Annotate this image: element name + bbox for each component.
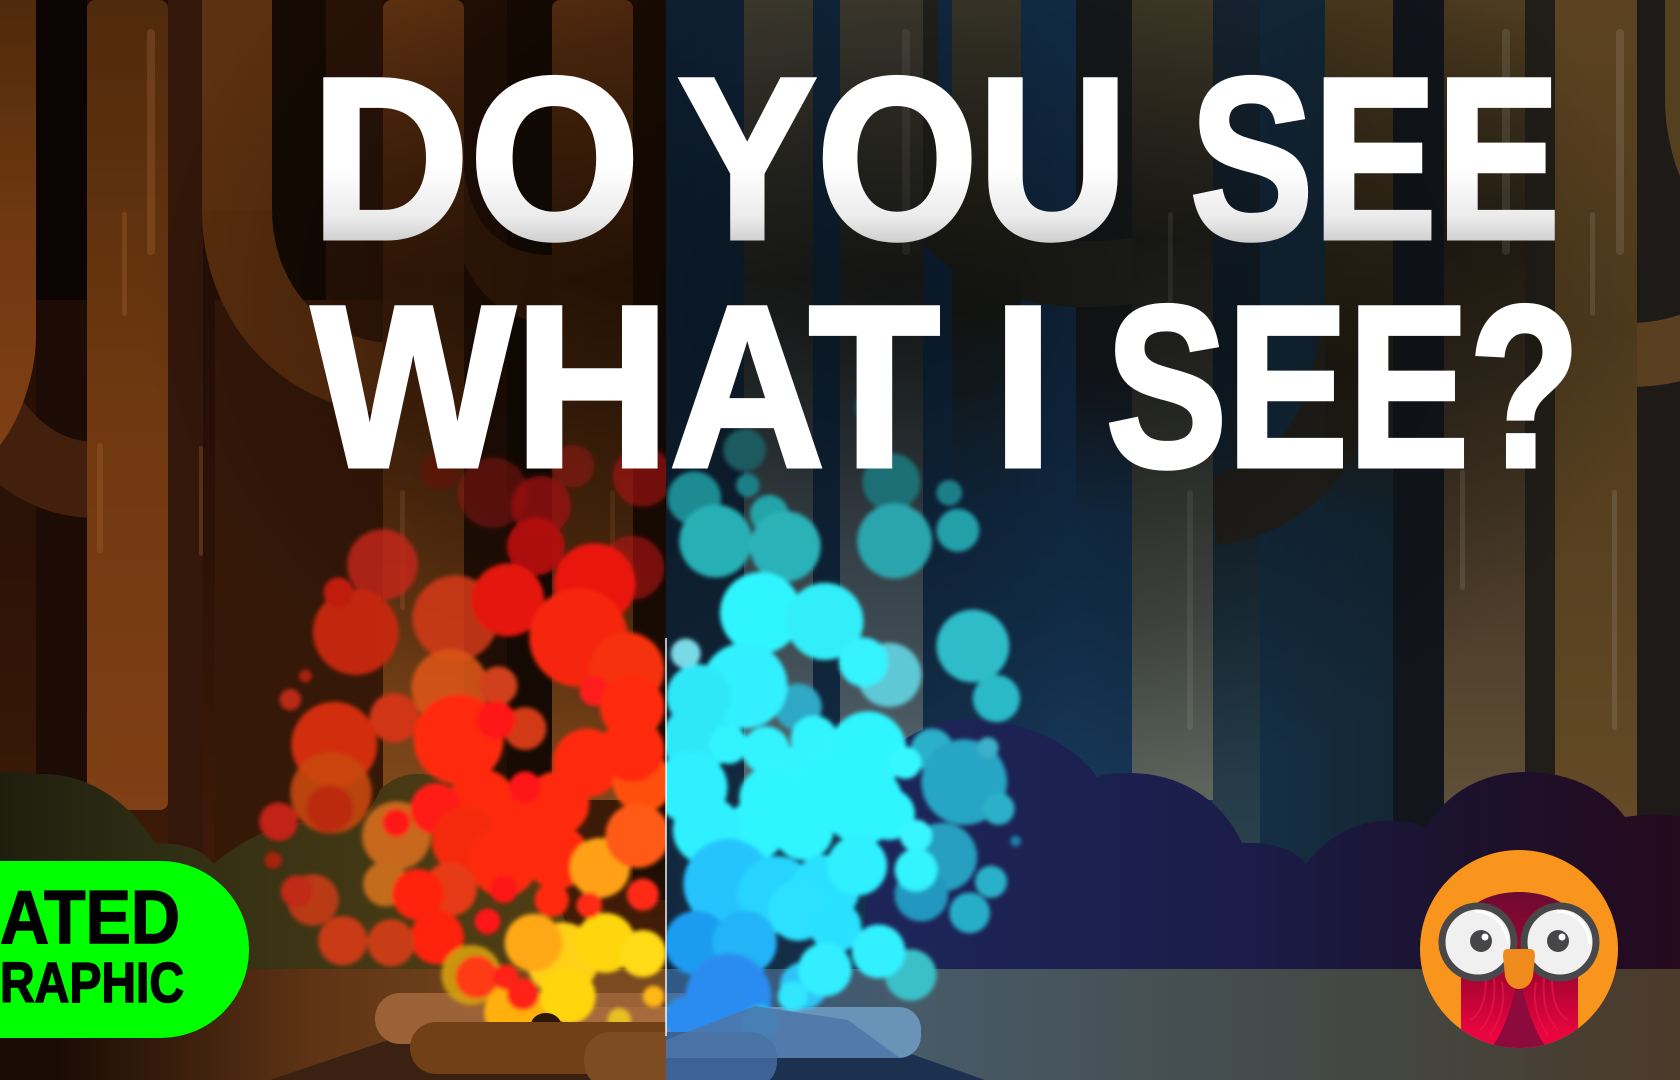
title line 2: I bbox=[993, 258, 1053, 515]
background: warm forest (left half) bbox=[0, 0, 666, 969]
logs: front row, cool half bbox=[666, 1006, 900, 1080]
title line 1: YOU bbox=[678, 30, 1128, 287]
title line 1: SEE bbox=[1190, 30, 1560, 287]
bushes: right bbox=[860, 719, 1680, 969]
title line 1: DO bbox=[311, 30, 640, 287]
tree trunks left bbox=[0, 0, 633, 810]
title line 2 bbox=[312, 258, 1580, 515]
fire: cool half bbox=[655, 393, 1021, 1041]
title line 2: WHAT bbox=[312, 258, 940, 515]
background: cool forest (right half) bbox=[666, 0, 1680, 969]
owl eyes bbox=[1442, 906, 1596, 978]
ground bbox=[0, 969, 1680, 1080]
seam between warm and cool halves bbox=[665, 638, 667, 1036]
fire: warm half bbox=[259, 445, 673, 1042]
tree trunks right bbox=[744, 0, 1637, 830]
logs: back row, warm half bbox=[375, 993, 666, 1044]
owl beak bbox=[1503, 949, 1535, 989]
logs: back row, cool half bbox=[666, 993, 921, 1058]
icon: owl logo bbox=[1420, 850, 1618, 1060]
badge: green pill: RAPHIC bbox=[0, 951, 184, 1015]
badge: green pill bbox=[0, 861, 249, 1038]
badge: green pill: ATED bbox=[0, 875, 180, 959]
bushes: left bbox=[0, 772, 580, 969]
title bbox=[311, 30, 1580, 515]
logs: front row, warm half bbox=[410, 1013, 666, 1080]
title line 1 bbox=[311, 30, 1560, 287]
